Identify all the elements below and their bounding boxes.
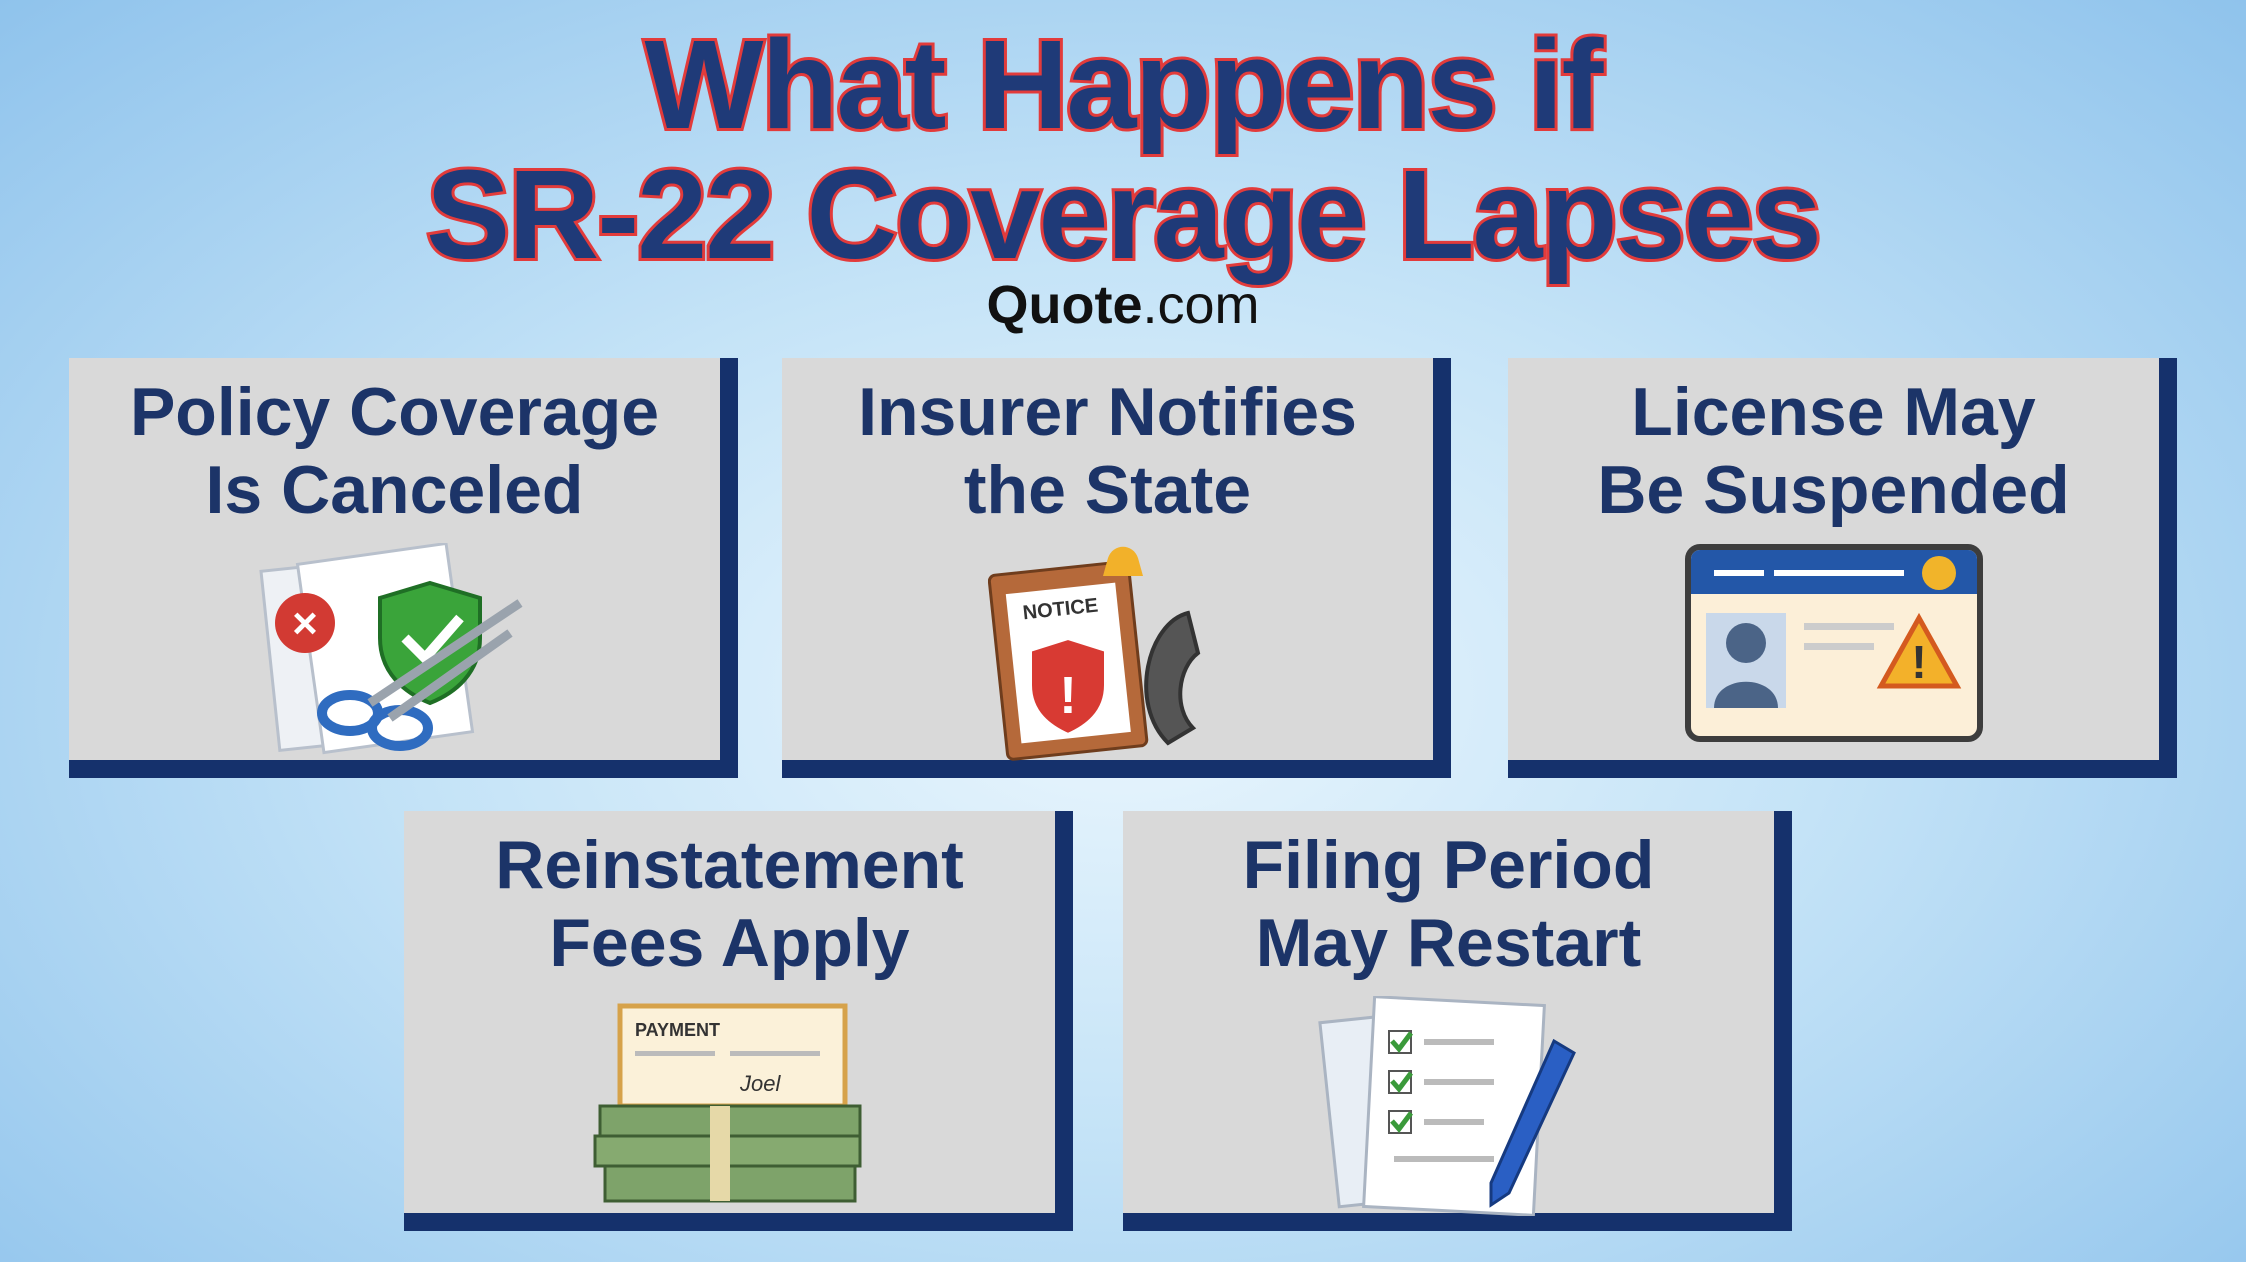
icon: checklist and pen: [1318, 996, 1576, 1216]
panel: reinstatement fees: Fees Apply: [549, 905, 910, 981]
panel: policy canceled: Is Canceled: [206, 452, 583, 528]
panel: insurer notifies: [782, 358, 1451, 778]
icon: document with scissors: [260, 543, 522, 754]
panel: filing period restart: [1123, 811, 1792, 1231]
icon: driver license with warning: [1685, 544, 1983, 742]
panel: license suspended: Be Suspended: [1597, 452, 2070, 528]
icon: driver license with warning: !: [1911, 636, 1926, 688]
panel: license suspended: License May: [1631, 374, 2036, 450]
brand logo: Quote.com: [986, 275, 1260, 335]
title: SR-22 Coverage Lapses: [426, 144, 1820, 285]
icon: payment check and cash: Joel: [738, 1071, 781, 1096]
panel: policy canceled: [69, 358, 738, 778]
title: What Happens if: [644, 14, 1602, 155]
panel: policy canceled: Policy Coverage: [130, 374, 659, 450]
panel: reinstatement fees: [404, 811, 1073, 1231]
icon: notice clipboard and phone: !: [1059, 667, 1076, 725]
panel: filing period restart: Filing Period: [1243, 827, 1654, 903]
panel: insurer notifies: the State: [964, 452, 1251, 528]
panel: reinstatement fees: Reinstatement: [495, 827, 964, 903]
icon: document with scissors: ×: [292, 599, 317, 648]
panel: filing period restart: May Restart: [1256, 905, 1641, 981]
icon: payment check and cash: [594, 1004, 862, 1202]
title: [426, 14, 1820, 288]
panel: insurer notifies: Insurer Notifies: [858, 374, 1357, 450]
icon: notice clipboard and phone: [988, 546, 1200, 761]
icon: notice clipboard and phone: NOTICE: [1021, 595, 1099, 624]
icon: payment check and cash: PAYMENT: [634, 1020, 720, 1040]
panel: license suspended: [1508, 358, 2177, 778]
